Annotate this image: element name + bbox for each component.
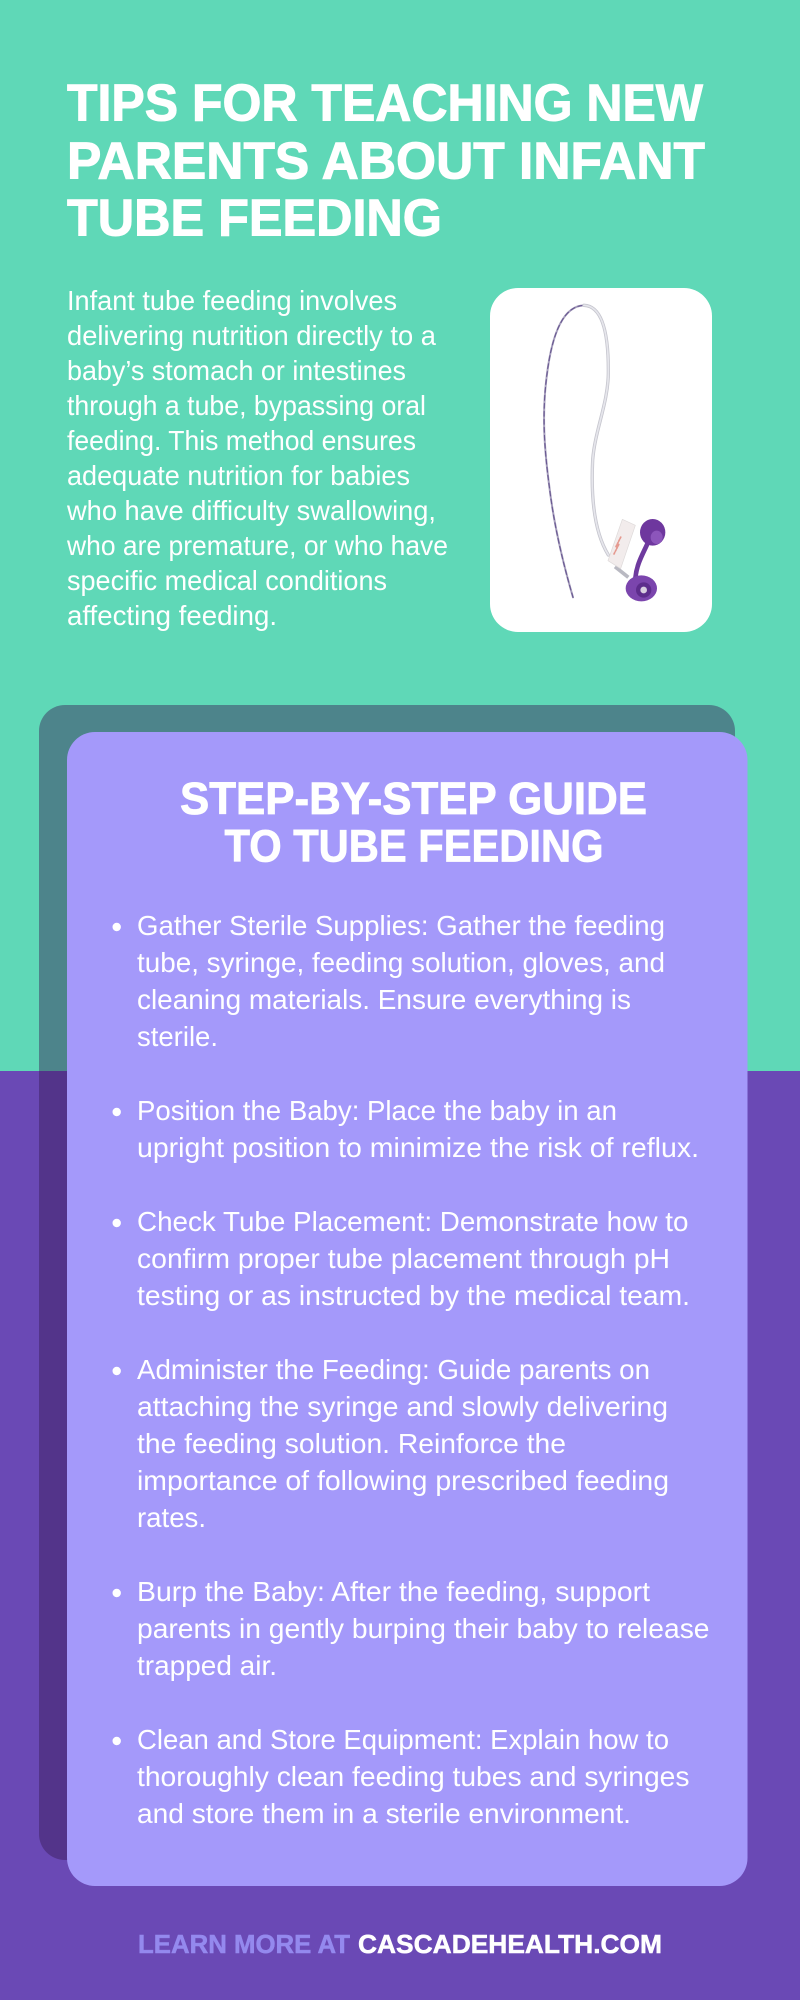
panel shadow [39,705,735,1860]
heading: step-by-step guide [180,773,647,872]
intro paragraph: feeding. This method ensures [67,425,416,456]
step: check tube placement: confirm proper tube placement through pH [137,1243,670,1274]
intro paragraph: Infant tube feeding involves [67,285,397,316]
step: administer the feeding: the feeding solution. Reinforce the [137,1428,566,1459]
step: administer the feeding: attaching the syringe and slowly delivering [137,1391,668,1422]
step: clean and store equipment: thoroughly clean feeding tubes and syringes [137,1761,690,1792]
step: check tube placement: Check Tube Placement: Demonstrate how to [137,1206,688,1237]
intro paragraph: baby’s stomach or intestines [67,355,406,386]
footer call to action [138,1931,662,1959]
intro paragraph: through a tube, bypassing oral [67,390,426,421]
step: position the baby: upright position to minimize the risk of reflux. [137,1132,699,1163]
step: clean and store equipment [112,1724,690,1829]
step: position the baby [112,1095,699,1163]
step: burp the baby: trapped air. [137,1650,277,1681]
intro paragraph: who are premature, or who have [66,530,448,561]
step: administer the feeding: Administer the Feeding: Guide parents on [137,1354,650,1385]
step: check tube placement [112,1206,690,1311]
heading: step-by-step guide: TO TUBE FEEDING [224,820,604,872]
footer call to action: LEARN MORE AT [138,1931,350,1959]
title [67,74,705,248]
title: TIPS FOR TEACHING NEW [67,74,704,132]
background: top teal section [0,0,800,1071]
intro paragraph: specific medical conditions [67,565,387,596]
step: gather sterile supplies: cleaning materials. Ensure everything is [137,984,631,1015]
intro paragraph: affecting feeding. [67,600,277,631]
step: administer the feeding: rates. [137,1502,206,1533]
step: administer the feeding: importance of following prescribed feeding [137,1465,669,1496]
panel: step-by-step guide [67,732,748,1886]
intro paragraph: who have difficulty swallowing, [66,495,436,526]
intro paragraph [66,285,448,631]
step: burp the baby: Burp the Baby: After the feeding, support [137,1576,650,1607]
step: clean and store equipment: Clean and Store Equipment: Explain how to [137,1724,669,1755]
step: administer the feeding [112,1354,669,1533]
intro paragraph: adequate nutrition for babies [67,460,410,491]
step: gather sterile supplies: sterile. [137,1021,218,1052]
background: bottom purple section [0,1071,800,2000]
step: burp the baby [112,1576,710,1681]
intro paragraph: delivering nutrition directly to a [67,320,437,351]
step: clean and store equipment: and store them in a sterile environment. [137,1798,631,1829]
image panel: feeding tube [490,288,712,632]
step: gather sterile supplies [112,910,665,1052]
title: TUBE FEEDING [67,190,442,248]
icon: feeding tube with purple connectors [544,305,665,601]
step: burp the baby: parents in gently burping their baby to release [137,1613,710,1644]
step: gather sterile supplies: tube, syringe, feeding solution, gloves, and [137,947,665,978]
step: gather sterile supplies: Gather Sterile Supplies: Gather the feeding [137,910,665,941]
heading: step-by-step guide: STEP-BY-STEP GUIDE [180,773,647,824]
step: check tube placement: testing or as instructed by the medical team. [137,1280,690,1311]
title: PARENTS ABOUT INFANT [67,132,705,190]
step: position the baby: Position the Baby: Place the baby in an [137,1095,617,1126]
footer call to action: CASCADEHEALTH.COM [358,1931,662,1959]
